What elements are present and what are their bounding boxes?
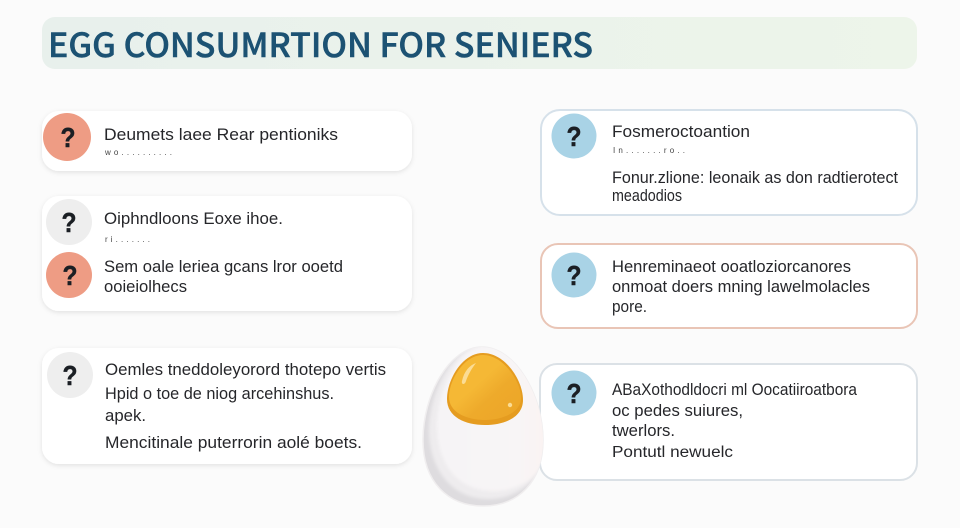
icon: grey question badge: ? [62,360,78,391]
icon: blue question badge [552,370,596,416]
text block: card 2: Oiphndloons Eoxe ihoe. [104,210,283,228]
text block: card 3 [105,361,386,452]
panel: right card 3 [540,364,917,480]
text block: card 1: wo.......... [104,148,173,157]
title banner [42,17,917,69]
text block: card 2: Sem oale leriea gcans lror ooetd [104,258,343,276]
icon: salmon question badge [46,252,92,298]
icon: egg with yolk [423,345,548,506]
text block: card 2: ooieiolhecs [104,278,187,296]
text block: right card 2: pore. [612,298,647,316]
text block: card 1 [104,126,338,157]
icon: grey question badge [47,352,93,398]
text block: right card 2: onmoat doers mning lawelmolacles [612,278,870,296]
panel: right card 1 [541,110,917,215]
text block: card 1: Deumets laee Rear pentioniks [104,126,338,144]
icon: blue question badge [552,114,596,158]
text block: right card 3: Pontutl newuelc [612,444,733,461]
icon: blue question badge: ? [566,378,582,409]
text block: right card 1 [612,123,898,205]
text block: card 3: Mencitinale puterrorin aolé boets. [105,434,362,452]
text block: right card 2: Henreminaeot ooatloziorcanores [612,258,851,276]
icon: blue question badge: ? [566,121,582,152]
text block: card 2: ri....... [105,235,151,244]
icon: salmon question badge [43,113,91,161]
text block: card 3: Hpid o toe de niog arcehinshus. [105,385,334,403]
icon: blue question badge [552,252,596,298]
panel: left card 1 [42,111,412,171]
icon: salmon question badge: ? [60,122,76,153]
text block: right card 1: Fosmeroctoantion [612,123,750,141]
icon: grey question badge [46,199,92,245]
icon: blue question badge: ? [566,260,582,291]
panel: right card 2 [541,244,917,328]
title: EGG CONSUMRTION FOR SENIERS [48,19,593,67]
text block: right card 1: Fonur.zlione: leonaik as don radtierotect [612,169,898,187]
text block: right card 3: oc pedes suiures, [612,402,743,420]
panel: left card 3 [42,348,412,464]
text block: right card 3 [612,381,858,461]
text block: right card 3: twerlors. [612,422,675,440]
icon: salmon question badge: ? [62,260,78,291]
text block: right card 3: ABaXothodldocri ml Oocatiiroatbora [612,381,858,399]
text block: right card 1: meadodios [612,187,682,205]
text block: card 2 [104,210,343,296]
text block: right card 1: In.......ro.. [613,146,686,155]
icon: grey question badge: ? [62,207,76,238]
text block: right card 2 [612,258,870,316]
panel: left card 2 [42,196,412,311]
text block: card 3: apek. [105,407,146,425]
text block: card 3: Oemles tneddoleyorord thotepo vertis [105,361,386,379]
